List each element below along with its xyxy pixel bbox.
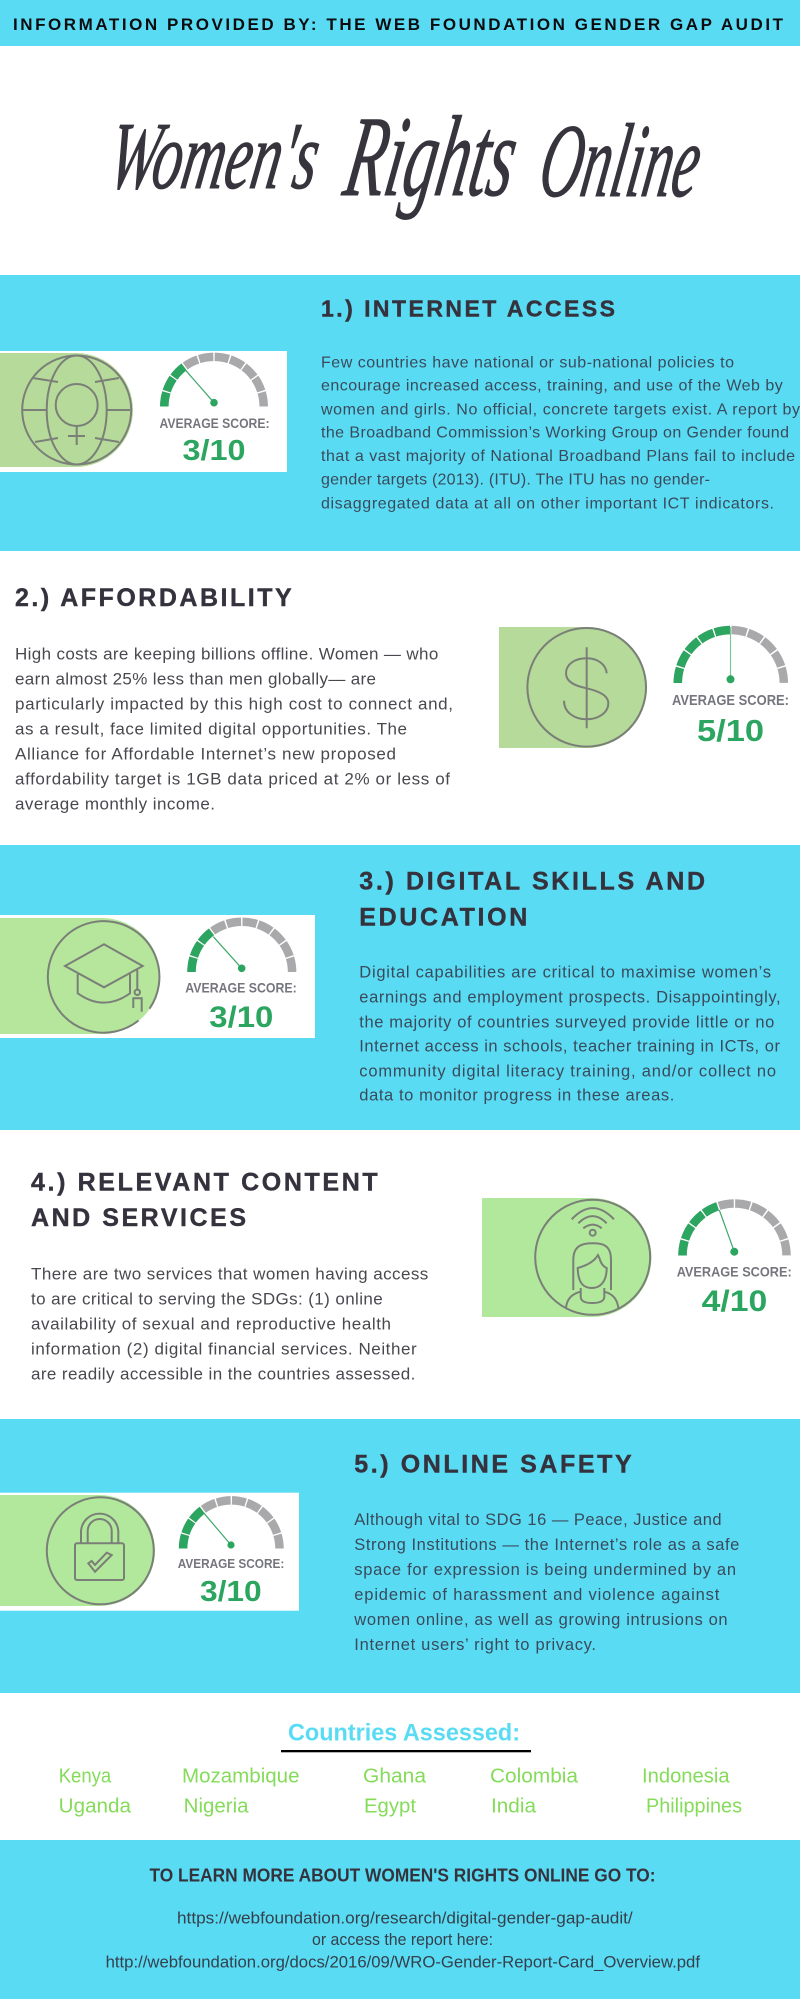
text block: digital skills: community digital literacy training, and/or collect no (359, 1063, 776, 1081)
panel: internet access (0, 275, 800, 551)
label: average score: AVERAGE SCORE: (178, 1556, 284, 1571)
text block: internet access: disaggregated data at all on other important ICT indicators. (321, 495, 774, 512)
icon: padlock (47, 1497, 154, 1604)
country list: Ghana (363, 1766, 427, 1788)
text block: relevant content: to are critical to serving the SDGs: (1) online (31, 1289, 383, 1308)
country list: Uganda (59, 1796, 132, 1818)
score card: affordability (499, 627, 789, 748)
links (106, 1909, 700, 1971)
text block: digital skills: Internet access in schools, teacher training in ICTs, or (359, 1038, 780, 1056)
icon: globe with female symbol (22, 356, 131, 464)
gauge: score 3 of 10 (192, 922, 292, 972)
text block: digital skills: earnings and employment prospects. Disappointingly, (359, 988, 781, 1006)
country list: Nigeria (184, 1796, 249, 1818)
title (101, 94, 710, 221)
links: http://webfoundation.org/docs/2016/09/WRO-Gender-Report-Card_Overview.pdf (106, 1953, 700, 1971)
heading: digital skills and education: EDUCATION (359, 903, 527, 931)
text block: online safety: epidemic of harassment and violence against (354, 1586, 720, 1604)
score: 4/10: 4/10 (702, 1285, 767, 1318)
text block: affordability: average monthly income. (15, 794, 215, 813)
text block: internet access: women and girls. No official, concrete targets exist. A report by (320, 401, 800, 418)
text block: affordability: High costs are keeping billions offline. Women — who (15, 644, 438, 663)
text block: online safety: space for expression is being undermined by an (354, 1561, 736, 1579)
panel: affordability (15, 584, 789, 813)
label: average score: AVERAGE SCORE: (677, 1264, 792, 1280)
links: https://webfoundation.org/research/digital-gender-gap-audit/ (177, 1909, 633, 1927)
text block: online safety: Internet users’ right to privacy. (354, 1636, 596, 1654)
panel: relevant content and services (31, 1169, 792, 1383)
country list: Egypt (364, 1796, 416, 1818)
text block: affordability (15, 644, 453, 813)
title: Women's (101, 103, 328, 209)
text block: digital skills: data to monitor progress in these areas. (359, 1087, 674, 1105)
gauge: score 5 of 10 (678, 627, 784, 683)
icon: dollar coin (527, 628, 646, 747)
heading: relevant content and services (31, 1169, 378, 1232)
text block: internet access: gender targets (2013). (ITU). The ITU has no gender- (321, 471, 710, 488)
panel: online safety (0, 1419, 800, 1693)
text block: affordability: particularly impacted by this high cost to connect and, (15, 694, 453, 713)
text block: internet access: the Broadband Commission’s Working Group on Gender found (321, 425, 789, 442)
score card: digital skills (0, 915, 315, 1038)
score: 3/10: 3/10 (182, 435, 246, 467)
country list: Kenya (59, 1766, 112, 1788)
heading: digital skills and education (359, 867, 705, 931)
text block: affordability: Alliance for Affordable Internet’s new proposed (15, 744, 396, 763)
text block: relevant content (31, 1264, 428, 1383)
text block: online safety: Strong Institutions — the Internet’s role as a safe (354, 1536, 739, 1554)
text block: relevant content: information (2) digital financial services. Neither (31, 1339, 417, 1358)
country list: Mozambique (182, 1766, 300, 1788)
score: 5/10: 5/10 (697, 713, 764, 748)
title: Rights (336, 94, 527, 221)
icon: woman with wifi (535, 1200, 650, 1315)
text block: relevant content: There are two services that women having access (31, 1264, 428, 1283)
links: or access the report here: (312, 1931, 493, 1949)
panel: digital skills and education (0, 845, 800, 1130)
text block: internet access (320, 354, 800, 512)
score card: online safety (0, 1493, 299, 1611)
heading: relevant content and services: 4.) RELEVANT CONTENT (31, 1169, 378, 1197)
score: 3/10: 3/10 (209, 1001, 273, 1034)
icon: graduation cap (48, 921, 159, 1033)
heading: relevant content and services: AND SERVICES (31, 1204, 246, 1232)
country list: India (491, 1796, 537, 1818)
text block: digital skills (359, 963, 781, 1105)
heading: countries assessed: Countries Assessed: (288, 1720, 520, 1747)
heading: learn more: TO LEARN MORE ABOUT WOMEN'S RIGHTS ONLINE GO TO: (150, 1866, 656, 1886)
panel: learn more footer (0, 1840, 800, 1999)
text block: internet access: Few countries have national or sub-national policies to (321, 354, 734, 371)
text block: internet access: encourage increased access, training, and use of the Web by (321, 378, 783, 395)
country list: Indonesia (642, 1766, 730, 1788)
country list (59, 1766, 742, 1818)
text block: affordability: as a result, face limited digital opportunities. The (15, 719, 407, 738)
heading: affordability: 2.) AFFORDABILITY (15, 584, 292, 612)
country list: Colombia (490, 1766, 579, 1788)
text block: affordability: earn almost 25% less than men globally— are (15, 669, 376, 688)
heading: internet access: 1.) INTERNET ACCESS (321, 296, 615, 322)
text block: digital skills: Digital capabilities are critical to maximise women’s (359, 963, 771, 981)
text block: relevant content: are readily accessible in the countries assessed. (31, 1364, 415, 1383)
label: average score: AVERAGE SCORE: (160, 416, 270, 431)
label: average score: AVERAGE SCORE: (185, 980, 297, 996)
text block: relevant content: availability of sexual and reproductive health (31, 1314, 391, 1333)
score card: relevant content (482, 1198, 792, 1318)
text block: digital skills: the majority of countries surveyed provide little or no (359, 1013, 774, 1031)
gauge: score 3 of 10 (183, 1500, 280, 1549)
text block: internet access: that a vast majority of National Broadband Plans fail to include (321, 448, 795, 465)
score card: internet access (0, 351, 287, 472)
country list: Philippines (646, 1796, 742, 1818)
heading: online safety: 5.) ONLINE SAFETY (354, 1450, 632, 1478)
text block: affordability: affordability target is 1GB data priced at 2% or less of (15, 769, 450, 788)
score: 3/10: 3/10 (200, 1576, 262, 1608)
gauge: score 4 of 10 (682, 1204, 786, 1256)
text block: online safety: Although vital to SDG 16 — Peace, Justice and (354, 1511, 722, 1529)
text block: online safety: women online, as well as growing intrusions on (353, 1611, 728, 1629)
panel: countries assessed (59, 1720, 742, 1818)
gauge: score 3 of 10 (164, 357, 264, 407)
top banner: INFORMATION PROVIDED BY: THE WEB FOUNDATION GENDER GAP AUDIT (13, 15, 784, 34)
top banner (0, 0, 800, 46)
text block: online safety (353, 1511, 739, 1654)
heading: digital skills and education: 3.) DIGITAL SKILLS AND (359, 867, 705, 895)
